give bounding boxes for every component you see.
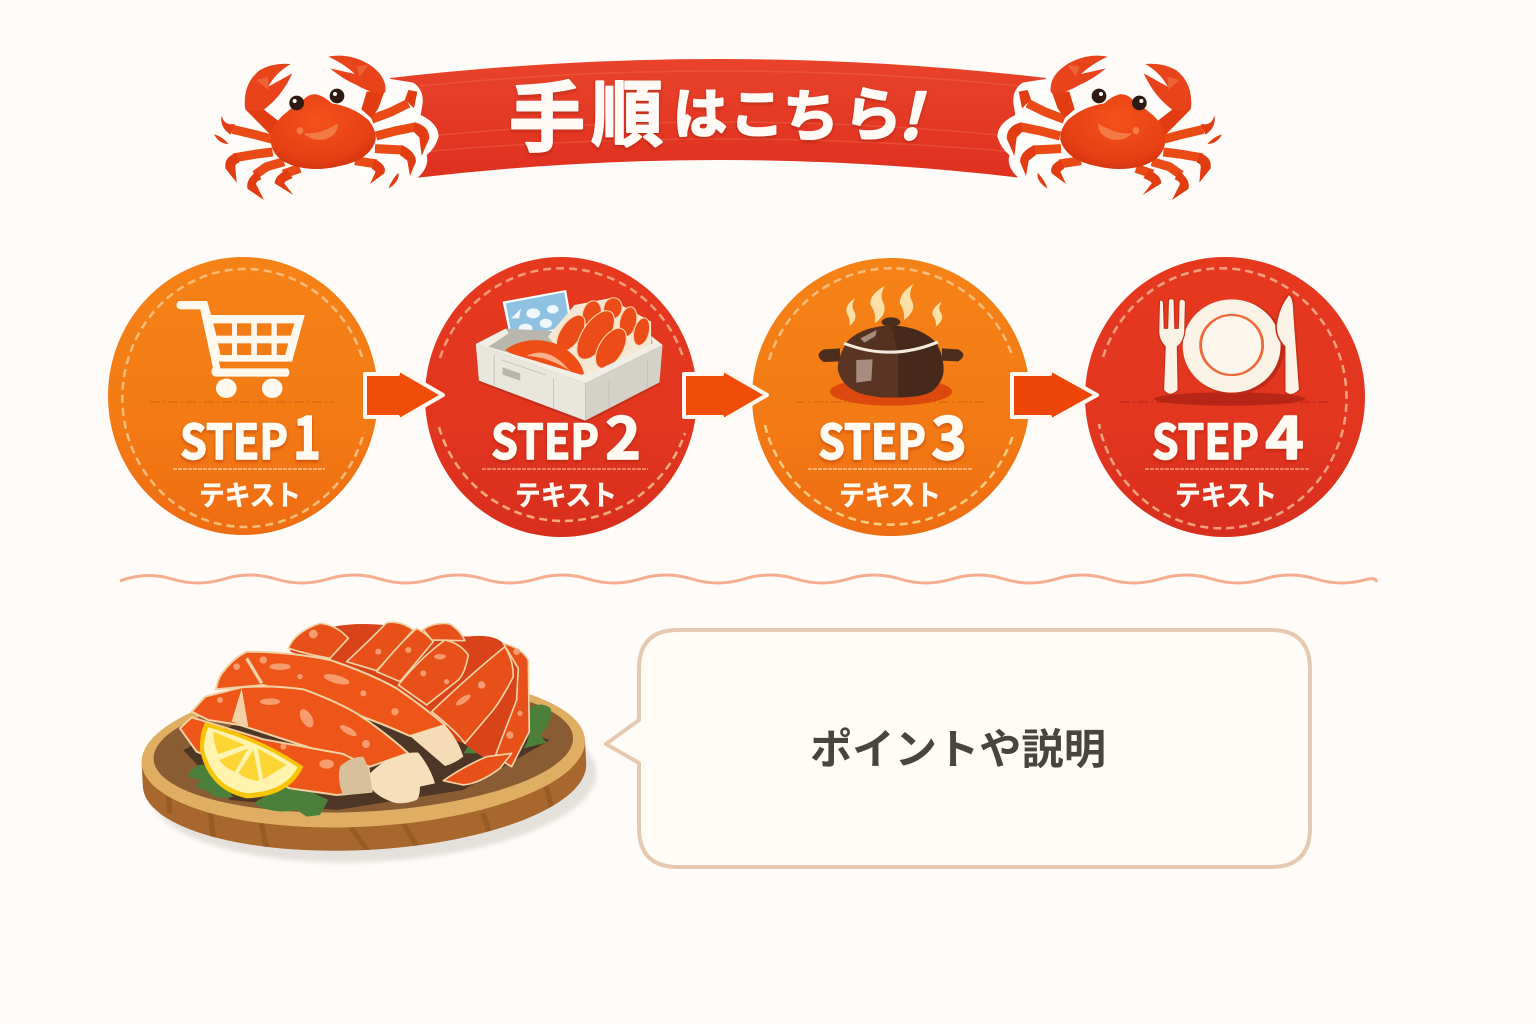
banner title text: 順 bbox=[591, 56, 663, 161]
step 1 number: 1 bbox=[293, 392, 321, 476]
step 2 number: 2 bbox=[605, 392, 641, 476]
leaves bbox=[187, 705, 551, 817]
lemon wedge bbox=[200, 722, 303, 798]
crab right bbox=[997, 56, 1222, 200]
meat speckles bbox=[217, 630, 523, 769]
crab left bbox=[214, 56, 439, 200]
step 3 badge bbox=[752, 258, 1030, 536]
callout text: ポイントや説明 bbox=[810, 716, 1106, 777]
step 1 label: STEP bbox=[180, 403, 288, 473]
step 2 badge bbox=[425, 257, 697, 537]
step 4 label: STEP bbox=[1152, 403, 1259, 473]
step 2 label: STEP bbox=[491, 403, 599, 473]
step 3 label: STEP bbox=[818, 403, 926, 473]
step 4 badge bbox=[1085, 257, 1365, 537]
step 3 text: テキスト bbox=[839, 474, 941, 514]
speech bubble callout bbox=[606, 630, 1310, 867]
long crab leg 1 bbox=[216, 652, 463, 766]
step 4 text: テキスト bbox=[1175, 474, 1277, 514]
arrow 1 bbox=[365, 369, 443, 421]
step 4 number: 4 bbox=[1265, 392, 1304, 476]
upper crab segments bbox=[288, 622, 529, 785]
icon: plate with fork and knife bbox=[1154, 294, 1305, 406]
arrow 2 bbox=[684, 369, 767, 421]
icon: cooler box with crab bbox=[476, 290, 663, 423]
banner title text: ら bbox=[844, 68, 902, 152]
wooden plate bbox=[142, 694, 586, 851]
title banner bbox=[390, 56, 1046, 178]
banner title text: 手 bbox=[509, 57, 585, 167]
arrow 3 bbox=[1012, 369, 1097, 421]
step 1 badge bbox=[108, 257, 378, 535]
long crab leg 2 bbox=[192, 687, 435, 803]
step 1 text: テキスト bbox=[199, 474, 301, 514]
long crab leg 3 bbox=[180, 717, 372, 796]
banner title text: ち bbox=[783, 72, 839, 153]
icon: shopping cart bbox=[177, 301, 305, 398]
step 3 number: 3 bbox=[931, 392, 967, 476]
banner title text: は bbox=[673, 70, 727, 149]
step 2 text: テキスト bbox=[515, 474, 617, 514]
icon: steaming pot bbox=[819, 284, 963, 406]
banner title text: ! bbox=[898, 67, 926, 157]
banner title text: こ bbox=[730, 70, 784, 149]
illustration: king crab legs on wooden plate bbox=[138, 622, 600, 873]
